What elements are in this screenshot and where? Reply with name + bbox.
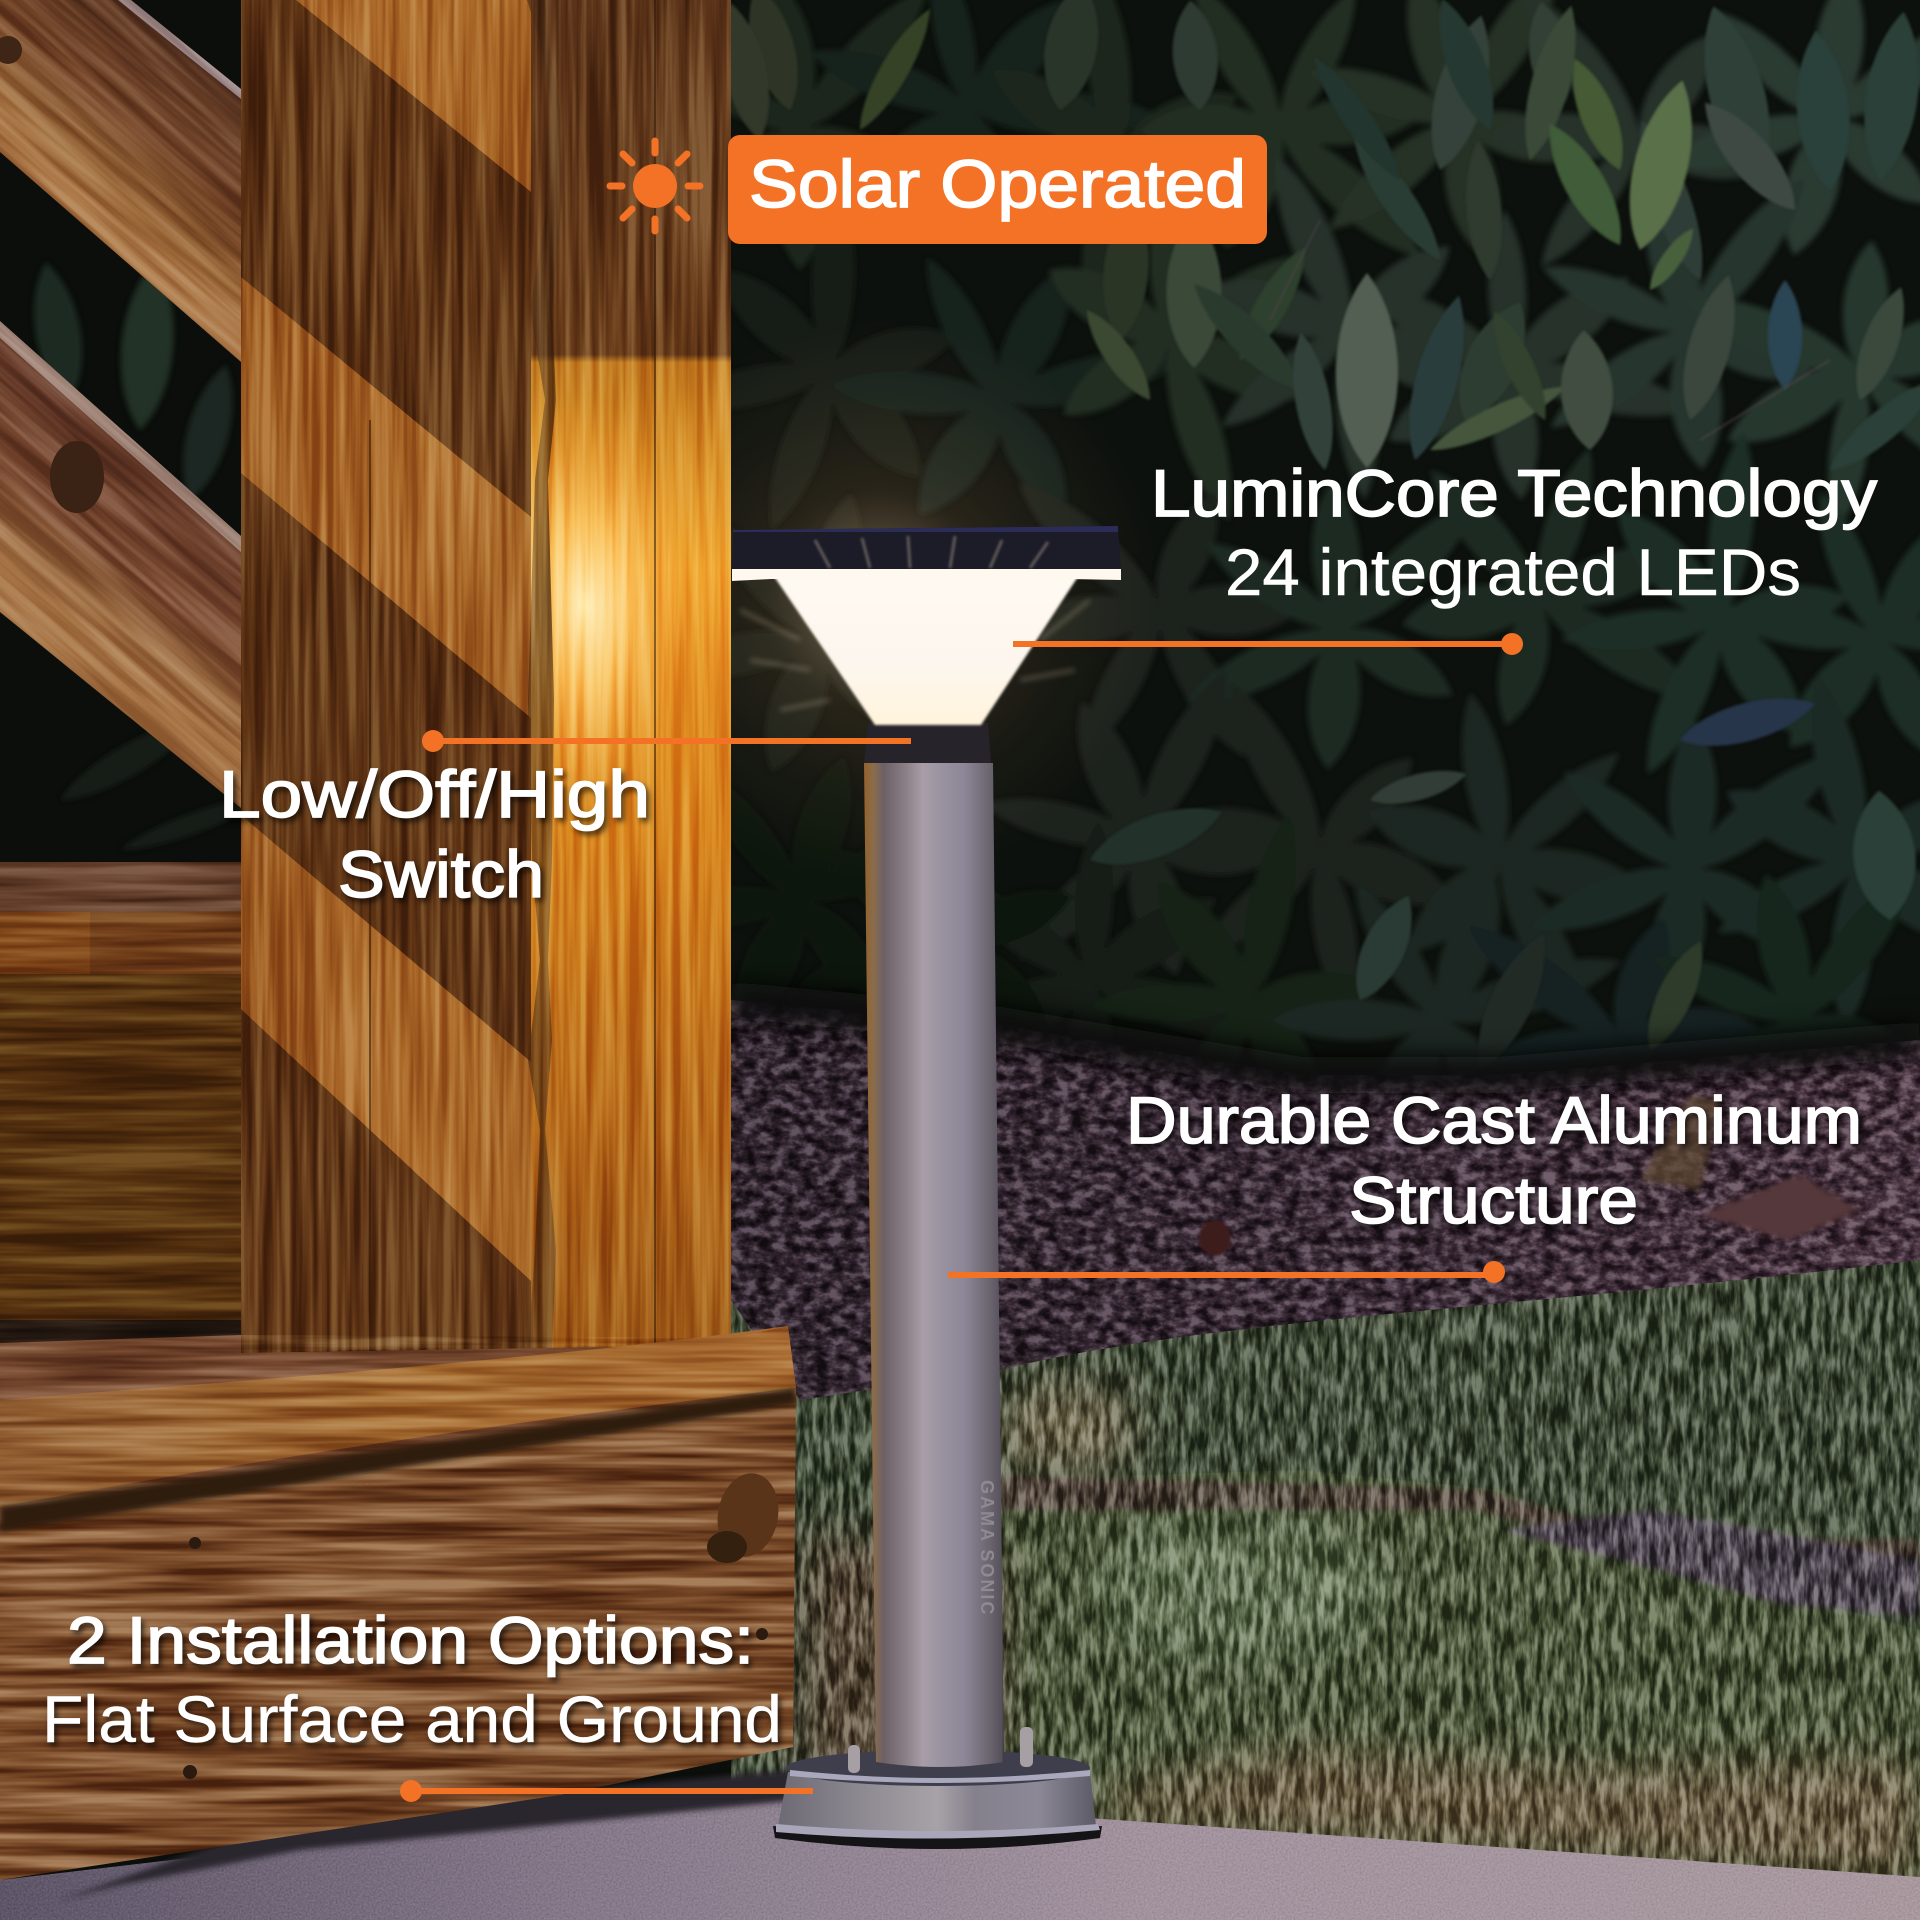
installation label: 2 Installation Options: xyxy=(67,1603,754,1677)
base wall xyxy=(778,1772,1096,1836)
badge text: Solar Operated xyxy=(749,147,1246,222)
panel: concrete path xyxy=(0,1770,1920,1920)
switch label xyxy=(219,757,650,911)
leader line xyxy=(948,1261,1505,1283)
lamp cone xyxy=(771,572,1081,725)
leader line xyxy=(1013,633,1523,655)
panel: diagonal stair stringers xyxy=(0,0,241,808)
installation label xyxy=(42,1603,782,1756)
screw left xyxy=(848,1745,860,1773)
screw right xyxy=(1020,1727,1033,1767)
panel rays xyxy=(815,536,1048,568)
callout: LuminCore technology xyxy=(1013,456,1877,655)
heading: LuminCore Technology xyxy=(1151,456,1877,530)
solar panel top xyxy=(732,526,1121,569)
foliage: hedge of leaves behind the light xyxy=(585,0,1920,1233)
callout: installation options xyxy=(42,1603,813,1802)
structure label: Structure xyxy=(1349,1163,1638,1237)
structure label xyxy=(1126,1083,1862,1237)
panel top edge xyxy=(733,526,1118,532)
light strip under panel xyxy=(732,569,1121,581)
leader line xyxy=(422,730,911,752)
dark leaf clusters xyxy=(585,0,1920,1233)
base upper lip highlight xyxy=(790,1770,1090,1783)
callout: solar operated xyxy=(610,135,1267,244)
panel: lower stair step xyxy=(0,862,241,1360)
switch label: Switch xyxy=(338,837,544,911)
installation label: Flat Surface and Ground xyxy=(42,1682,782,1756)
collar xyxy=(864,723,991,763)
glow: lamp light halo xyxy=(600,320,1160,880)
background foliage behind stairs xyxy=(24,258,274,860)
ground: grass swaths xyxy=(731,1260,1920,1890)
structure label: Durable Cast Aluminum xyxy=(1126,1083,1862,1157)
base rim xyxy=(773,1826,1102,1849)
panel: deck tread xyxy=(0,1326,800,1511)
panel: wooden deck post xyxy=(241,0,731,1353)
switch label: Low/Off/High xyxy=(219,757,650,831)
subheading: 24 integrated LEDs xyxy=(1225,535,1801,609)
panel: deck riser board xyxy=(0,1380,800,1890)
icon: solar bollard light xyxy=(732,526,1121,1849)
badge xyxy=(728,135,1267,244)
side light rays xyxy=(740,600,1090,710)
base lower lip xyxy=(776,1824,1100,1839)
callout: switch xyxy=(219,730,911,911)
brand mark on pole: GAMA SONIC xyxy=(977,1480,997,1616)
icon: sun xyxy=(610,141,700,231)
highlighted leaves xyxy=(711,0,1920,1079)
ground: mulch bed xyxy=(731,1000,1920,1420)
callout: cast aluminum xyxy=(948,1083,1862,1283)
base plate xyxy=(786,1750,1090,1786)
leader line xyxy=(400,1780,813,1802)
pole xyxy=(864,763,1004,1767)
